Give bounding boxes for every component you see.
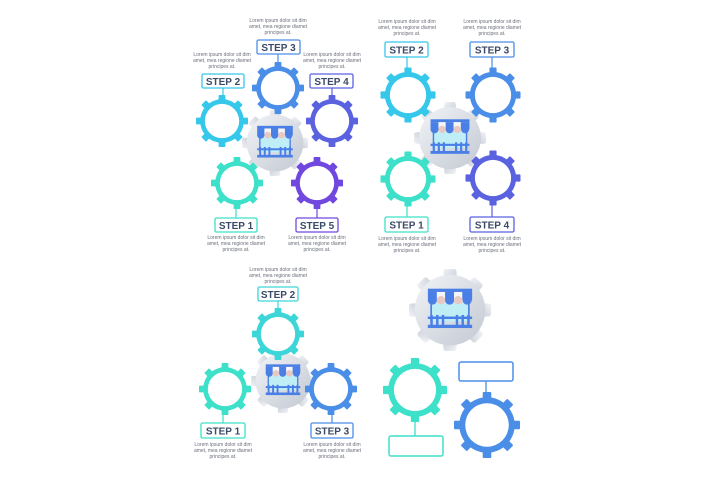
text: step 5 description: amet, mea regione diamet [288, 241, 347, 247]
text: step 1 description: Lorem ipsum dolor sit dim [194, 442, 252, 448]
gear: step 4: STEP 4 [314, 77, 349, 88]
gear: step 4 [306, 74, 358, 147]
text: step 3 description: amet, mea regione diamet [249, 24, 308, 30]
gear: step 5 [291, 157, 343, 232]
text: step 2 description [249, 267, 308, 285]
text: step 2 description: principes at. [265, 279, 291, 285]
text: step 2 description: principes at. [394, 31, 420, 37]
text: step 3 description: amet, mea regione diamet [463, 25, 522, 31]
text: step 1 description: amet, mea regione diamet [378, 242, 437, 248]
text: step 1 description: principes at. [210, 454, 236, 460]
text: step 4 description: amet, mea regione diamet [463, 242, 522, 248]
gear: blue with box above [454, 362, 520, 458]
center gear: store [251, 349, 315, 413]
gear: step 3: STEP 3 [261, 43, 296, 54]
gear: step 4: STEP 4 [475, 220, 510, 232]
text: step 2 description: amet, mea regione diamet [378, 25, 437, 31]
text: step 2 description [378, 19, 437, 37]
gear: step 1 [199, 363, 251, 438]
center gear: store [409, 269, 491, 351]
panel: three steps [194, 267, 362, 460]
text: step 3 description: Lorem ipsum dolor sit dim [463, 19, 521, 25]
text: step 1 description: principes at. [223, 247, 249, 253]
text: step 4 description: principes at. [319, 64, 345, 70]
text: step 3 description: principes at. [265, 30, 291, 36]
text: step 5 description: Lorem ipsum dolor sit dim [288, 235, 346, 241]
text: step 3 description: principes at. [479, 31, 505, 37]
text: step 3 description [463, 19, 522, 37]
text: step 3 description: Lorem ipsum dolor sit dim [249, 18, 307, 24]
gear: step 1: STEP 1 [206, 426, 241, 438]
text: step 5 description [288, 235, 347, 253]
gear: step 2: STEP 2 [389, 46, 424, 56]
text: step 1 description [194, 442, 253, 460]
gear: step 2 [380, 42, 436, 122]
text: step 3 description: amet, mea regione diamet [303, 448, 362, 454]
gear: step 3: STEP 3 [315, 426, 350, 438]
text: step 5 description: principes at. [304, 247, 330, 253]
text: step 1 description: amet, mea regione diamet [194, 448, 253, 454]
text: step 4 description: principes at. [479, 248, 505, 254]
text: step 1 description: amet, mea regione diamet [207, 241, 266, 247]
gear: step 1 [211, 157, 263, 232]
text: step 2 description: Lorem ipsum dolor sit dim [249, 267, 307, 273]
text: step 2 description: principes at. [209, 64, 235, 70]
text: step 2 description: amet, mea regione diamet [193, 58, 252, 64]
gear: step 1: STEP 1 [219, 221, 254, 232]
gear: step 2: STEP 2 [206, 77, 241, 88]
text: step 3 description: Lorem ipsum dolor sit dim [303, 442, 361, 448]
gear: step 1 [380, 152, 436, 232]
gear: step 3: STEP 3 [475, 46, 510, 56]
text: step 1 description [207, 235, 266, 253]
panel: four steps [378, 19, 522, 254]
text: step 3 description [303, 442, 362, 460]
gear: step 3 [466, 42, 520, 122]
gear: step 3 [252, 40, 304, 114]
gear: step 5: STEP 5 [300, 221, 335, 232]
gear: step 2: STEP 2 [261, 290, 296, 301]
text: step 4 description: Lorem ipsum dolor sit dim [303, 52, 361, 58]
panel: five steps [193, 18, 362, 253]
text: step 2 description [193, 52, 252, 70]
text: step 4 description [303, 52, 362, 70]
text: step 1 description [378, 236, 437, 254]
text: step 3 description: principes at. [319, 454, 345, 460]
center gear: store [414, 102, 486, 174]
gear: teal with box below [383, 358, 447, 456]
text: step 1 description: Lorem ipsum dolor sit dim [378, 236, 436, 242]
text: step 4 description: Lorem ipsum dolor sit dim [463, 236, 521, 242]
panel: blank elements [383, 269, 520, 458]
text: step 1 description: Lorem ipsum dolor sit dim [207, 235, 265, 241]
text: step 1 description: principes at. [394, 248, 420, 254]
center gear: store [242, 110, 308, 176]
text: step 3 description [249, 18, 308, 36]
text: step 2 description: Lorem ipsum dolor sit dim [193, 52, 251, 58]
text: step 2 description: amet, mea regione diamet [249, 273, 308, 279]
text: step 4 description [463, 236, 522, 254]
gear: step 3 [305, 363, 357, 438]
gear: step 2 [252, 287, 304, 360]
text: step 4 description: amet, mea regione diamet [303, 58, 362, 64]
gear: step 4 [466, 150, 520, 232]
gear: step 2 [196, 74, 248, 147]
text: step 2 description: Lorem ipsum dolor sit dim [378, 19, 436, 25]
gear: step 1: STEP 1 [389, 220, 424, 232]
